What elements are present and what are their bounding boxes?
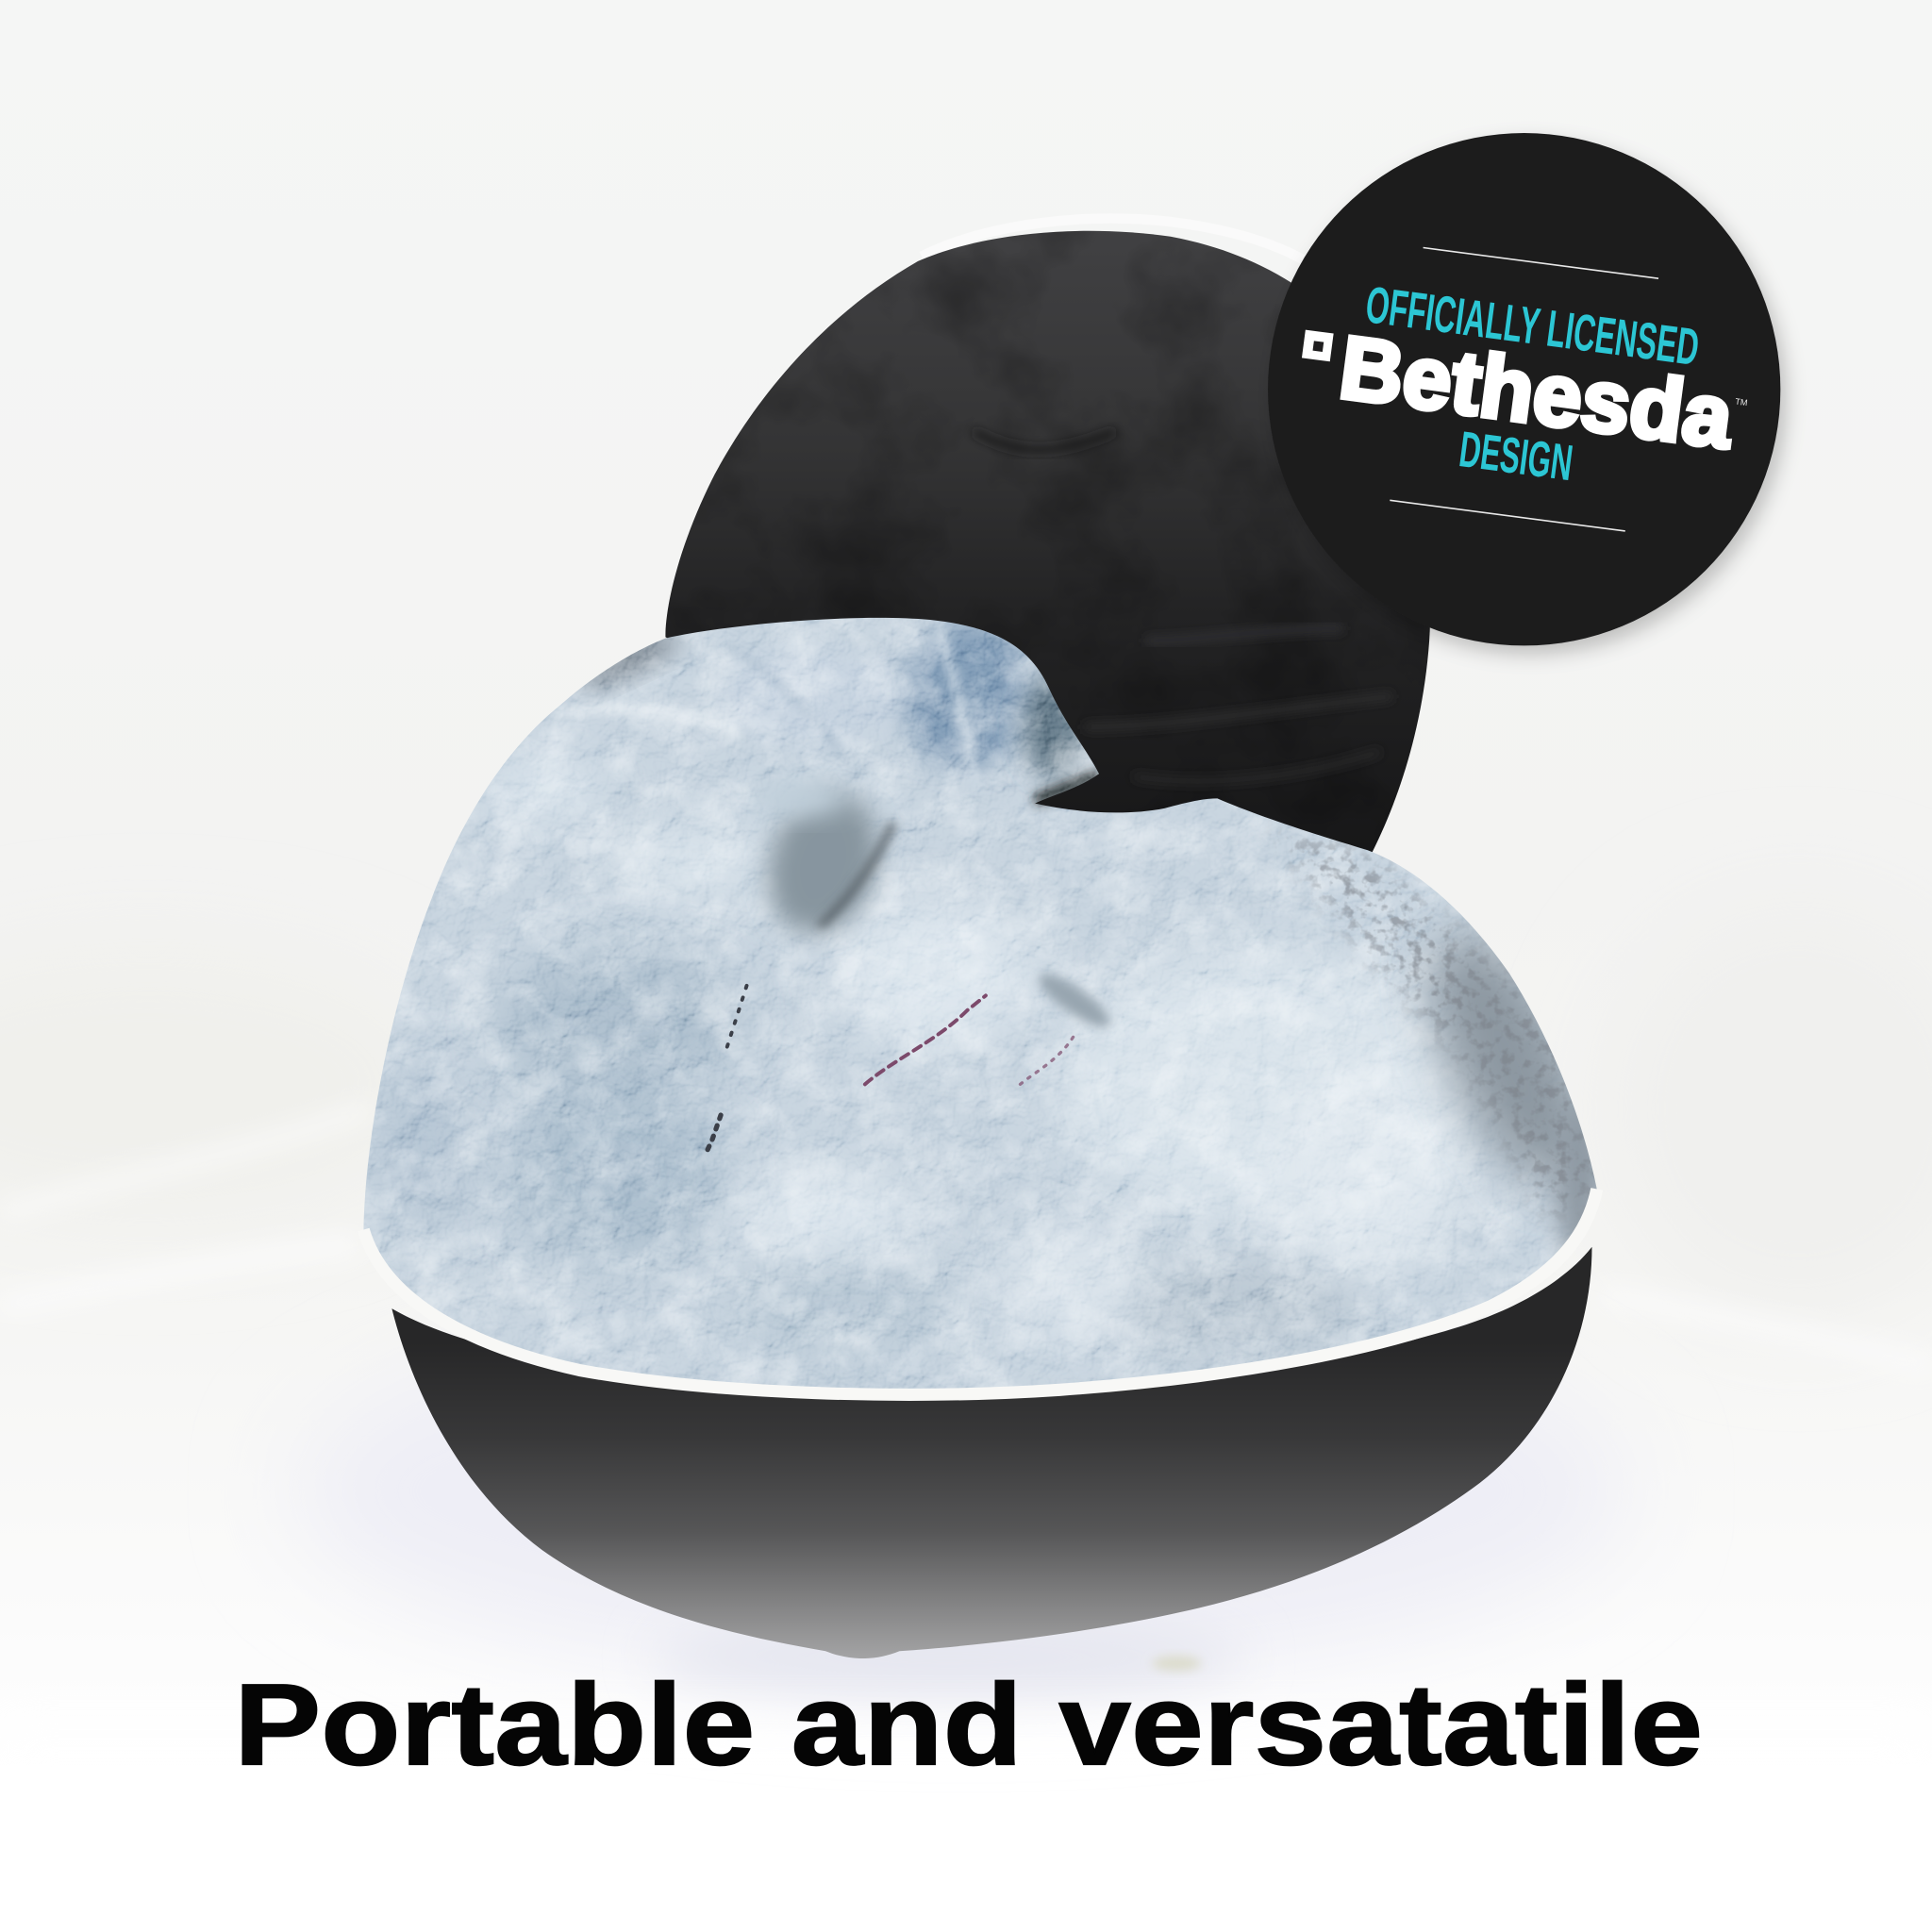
design label: DESIGN bbox=[1457, 422, 1575, 491]
mottled blue shadows bbox=[492, 949, 740, 1096]
inner neck band bbox=[555, 623, 1099, 801]
badge: officially licensed Bethesda design bbox=[1268, 133, 1780, 645]
second small rock bbox=[1036, 971, 1113, 1032]
lumpy snow relief bbox=[364, 618, 1557, 1389]
bottom rule bbox=[1390, 500, 1625, 531]
bright snow highlights bbox=[1059, 949, 1454, 1220]
Bethesda square mark bbox=[1302, 330, 1334, 361]
rock outcrop bbox=[752, 778, 894, 946]
trademark: TM bbox=[1735, 396, 1748, 408]
cloud texture overlay bbox=[364, 619, 1563, 1389]
badge disc bbox=[1268, 133, 1780, 645]
lower black velvet section bbox=[391, 1247, 1592, 1658]
upper black velvet section bbox=[665, 230, 1430, 853]
purple stain bbox=[865, 995, 1074, 1084]
white piping seam bbox=[363, 1189, 1597, 1394]
Bethesda wordmark: Bethesda bbox=[1335, 317, 1739, 467]
snow-print section bbox=[345, 604, 1626, 1417]
pillow: folded travel pillow bbox=[345, 209, 1626, 1675]
title: Portable and versatatile bbox=[234, 1660, 1703, 1790]
white piping on upper section bbox=[922, 219, 1306, 261]
officially licensed label: OFFICIALLY LICENSED bbox=[1362, 275, 1703, 376]
top rule bbox=[1424, 248, 1658, 278]
dark specks bbox=[705, 986, 747, 1156]
right shaded grit bbox=[1278, 831, 1596, 1255]
